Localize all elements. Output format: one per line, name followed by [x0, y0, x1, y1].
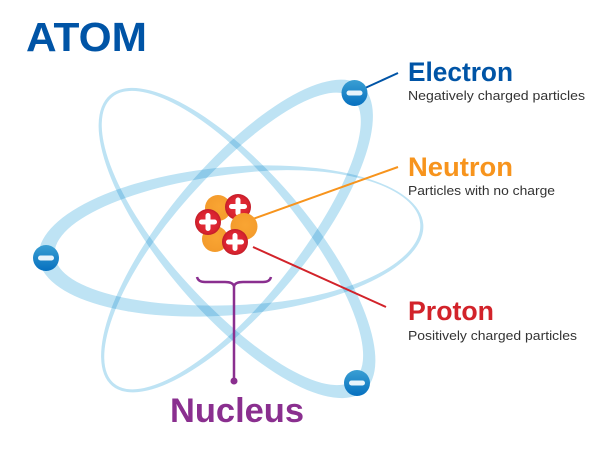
- orbit: ascending diagonal: [58, 41, 416, 431]
- proton bottom: [222, 229, 248, 255]
- electron left: [33, 245, 59, 271]
- label: Neutron: [408, 152, 555, 198]
- label: Proton: Proton: [408, 296, 494, 326]
- nucleus cluster: [195, 194, 258, 255]
- label: Neutron: Particles with no charge: [408, 183, 555, 198]
- label: Proton: Positively charged particles: [408, 328, 578, 343]
- orbit: descending diagonal: [55, 48, 419, 438]
- electron bottom right: [344, 370, 370, 396]
- proton top: [225, 194, 251, 220]
- leader line: neutron: [250, 167, 398, 220]
- leader line: electron: [364, 73, 398, 88]
- label: Electron: Negatively charged particles: [408, 88, 586, 103]
- title: ATOM: [26, 14, 147, 60]
- proton left: [195, 209, 221, 235]
- label: Electron: Electron: [408, 57, 513, 87]
- label: Proton: [408, 296, 578, 343]
- nucleus bracket: [197, 277, 271, 384]
- label: Nucleus: Nucleus: [170, 392, 304, 430]
- leader line: proton: [253, 247, 386, 307]
- label: Electron: [408, 57, 586, 103]
- electron top right: [342, 80, 368, 106]
- orbit: horizontal: [32, 150, 430, 332]
- label: Neutron: Neutron: [408, 152, 513, 182]
